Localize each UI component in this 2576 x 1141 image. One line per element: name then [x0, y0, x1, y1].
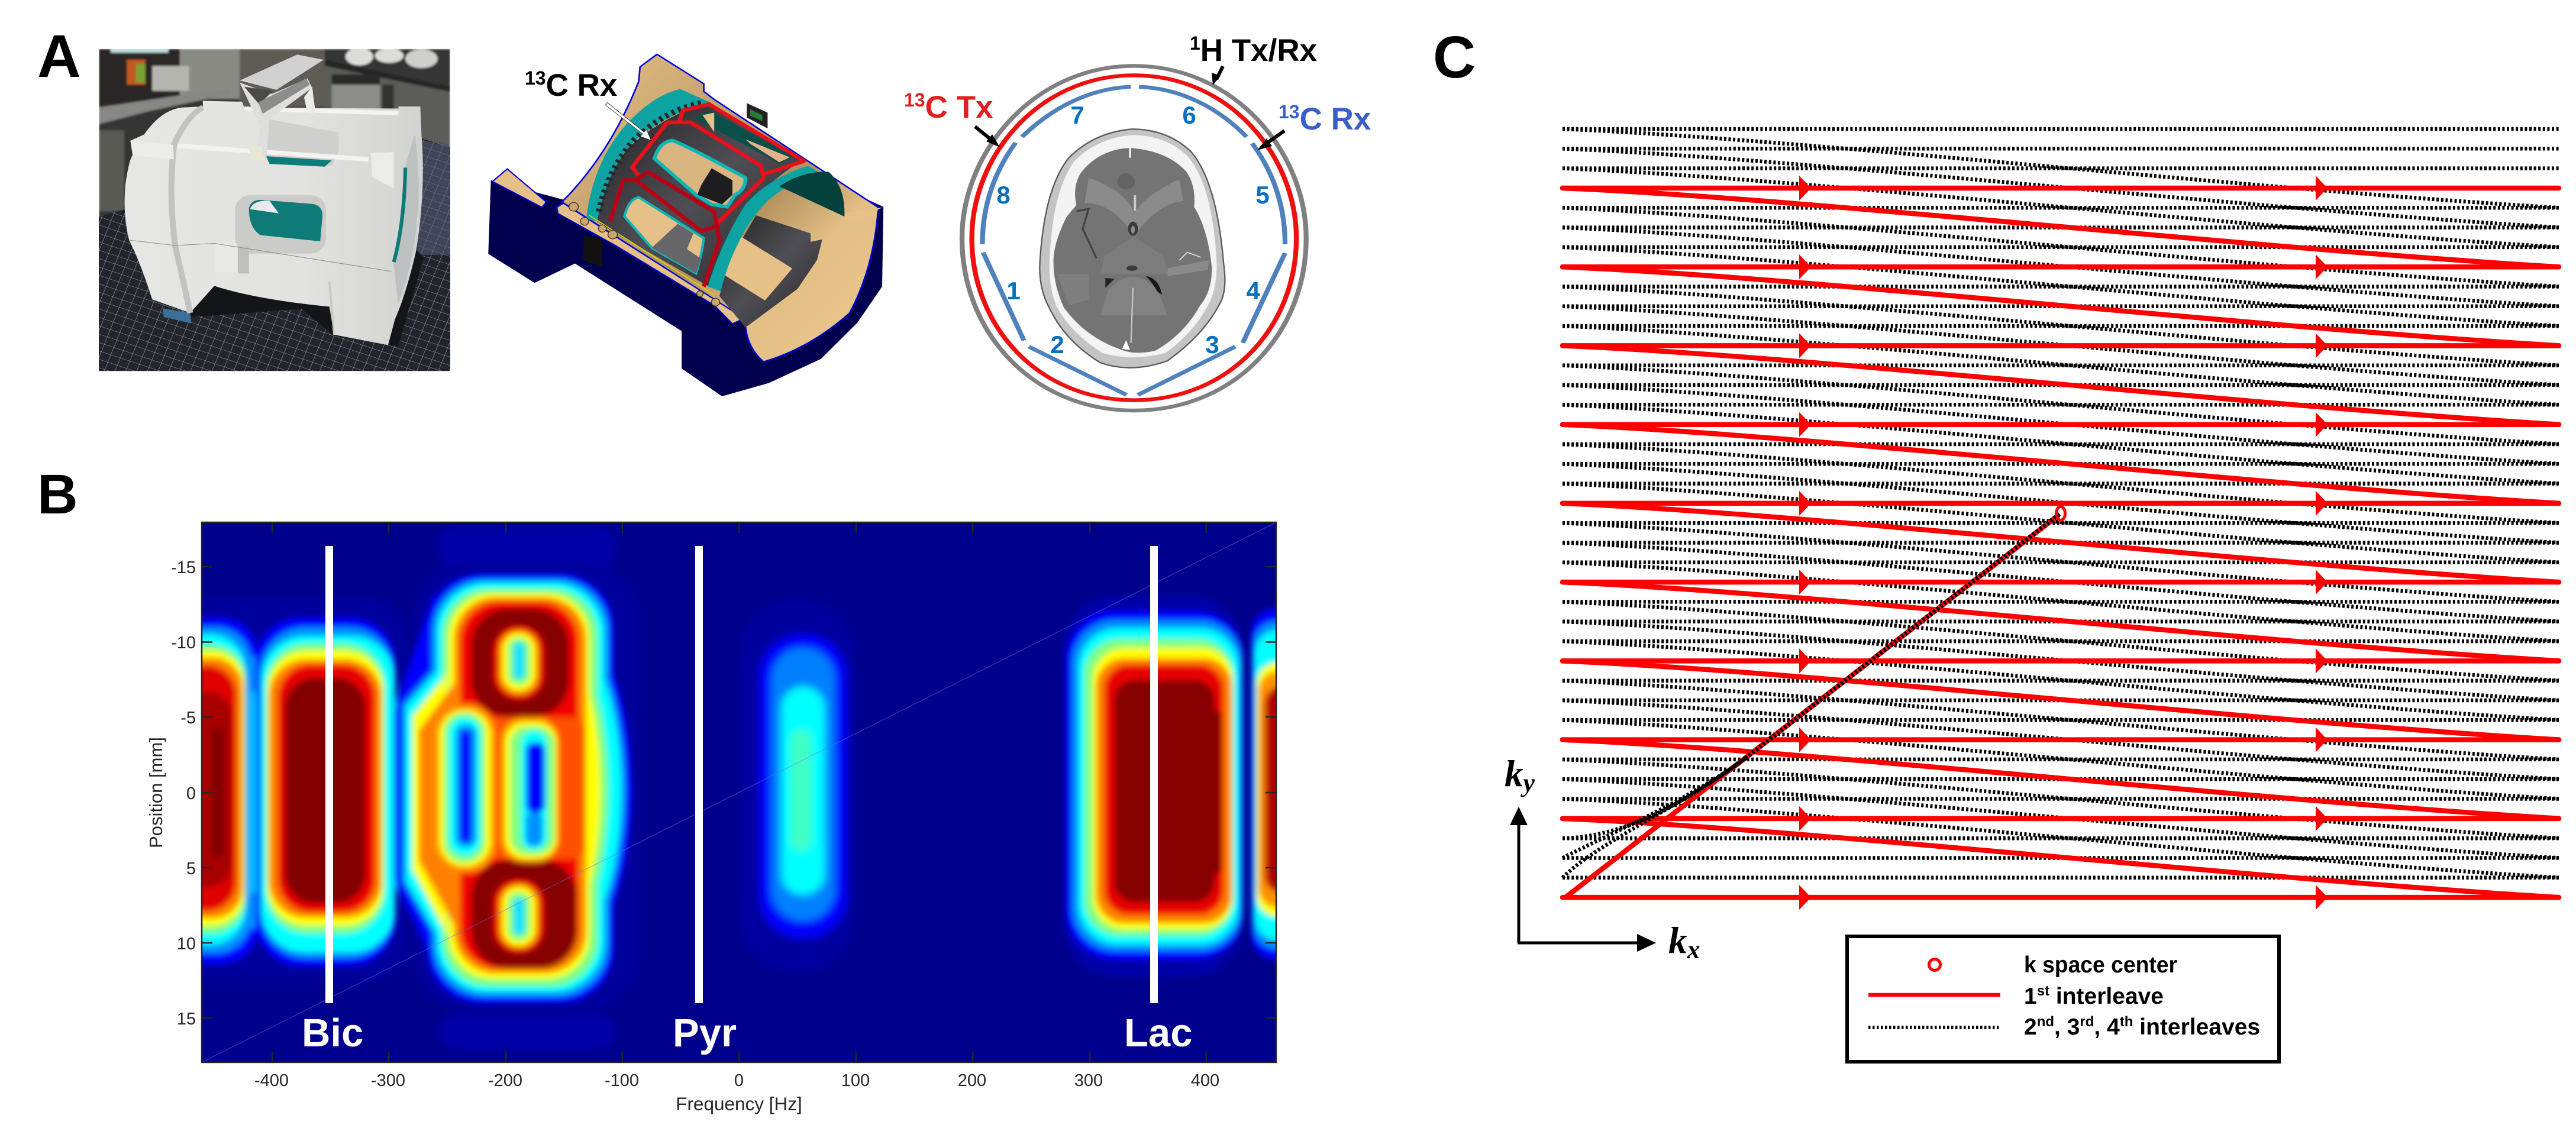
kx label: k — [1668, 920, 1687, 961]
x-axis tick labels: 0 — [734, 1071, 744, 1090]
x-axis tick labels: -200 — [488, 1071, 522, 1090]
legend text: 1st interleave: 1 — [2024, 984, 2037, 1009]
legend text: k space center: k space center — [2024, 952, 2177, 978]
x-axis title: Frequency [Hz] — [676, 1093, 802, 1114]
label: 13C Tx: 13 — [904, 89, 925, 111]
y-axis tick labels: 10 — [177, 935, 196, 953]
coil layout cross-section diagram — [904, 33, 1371, 410]
label: 13C Rx: C Rx — [1300, 102, 1371, 137]
legend text: other interleaves: , 3 — [2054, 1014, 2080, 1040]
13C Tx coil ring — [972, 75, 1296, 400]
label: 1H Tx/Rx: H Tx/Rx — [1200, 33, 1318, 68]
y-axis tick labels: 5 — [186, 859, 196, 878]
red trajectory: 1st interleave — [1563, 188, 2559, 897]
outer 1H Tx/Rx coil ring — [962, 66, 1306, 410]
kx axis arrow — [1518, 934, 1656, 952]
metabolite labels — [304, 1017, 1192, 1055]
legend — [1847, 936, 2279, 1062]
label: 13C Rx on cutaway: 13 — [525, 67, 546, 89]
legend text: 1st interleave: st — [2037, 983, 2049, 999]
panel label B: B — [37, 463, 78, 526]
element numbers: 2 — [1050, 331, 1064, 358]
label: 1H Tx/Rx: 1 — [1190, 33, 1200, 54]
axial brain MR image — [1040, 129, 1225, 368]
x-axis tick labels: 300 — [1074, 1071, 1103, 1090]
element numbers — [996, 101, 1270, 358]
x-axis tick labels — [254, 1071, 1219, 1090]
13C Rx array elements — [982, 87, 1285, 395]
label: 13C Rx on cutaway: C Rx — [546, 68, 618, 103]
x-axis tick labels: 200 — [958, 1071, 986, 1090]
y-axis tick labels: 15 — [177, 1010, 196, 1029]
legend text: 1st interleave: interleave — [2049, 984, 2164, 1009]
element numbers: 8 — [996, 181, 1011, 209]
y-axis tick labels: 0 — [186, 784, 196, 803]
legend text: other interleaves: nd — [2037, 1014, 2054, 1030]
element numbers: 1 — [1006, 277, 1021, 305]
x-axis tick labels: -400 — [254, 1071, 289, 1090]
panel B: spectral-spatial heat map — [37, 463, 1312, 1114]
x-axis tick labels: -300 — [371, 1071, 405, 1090]
element numbers: 4 — [1246, 277, 1260, 305]
legend symbol: other interleaves — [1868, 1026, 2000, 1029]
metabolite frequency markers — [325, 546, 1158, 1003]
panel C: k-space trajectory — [1433, 24, 2559, 1062]
direction arrowheads — [1799, 176, 2328, 910]
metabolite labels: Bic — [302, 1011, 363, 1055]
legend text: other interleaves: th — [2120, 1014, 2133, 1030]
x-axis tick labels: 400 — [1191, 1071, 1219, 1090]
ky axis arrow — [1510, 807, 1528, 943]
legend text: other interleaves: 2 — [2024, 1014, 2037, 1040]
panel label C: C — [1433, 24, 1476, 90]
legend symbol: k space center — [1929, 959, 1941, 970]
black dotted rows: 2nd, 3rd, 4th interleaves — [1563, 129, 2559, 878]
element numbers: 6 — [1182, 101, 1196, 129]
metabolite labels: Lac — [1124, 1011, 1192, 1055]
element numbers: 7 — [1070, 101, 1084, 129]
ky label: k — [1505, 753, 1523, 794]
panel label A: A — [37, 22, 81, 90]
legend symbol: 1st interleave — [1868, 993, 2000, 997]
heat map image — [172, 522, 1312, 1062]
kx label: x — [1686, 935, 1700, 964]
label: 13C Tx: C Tx — [925, 90, 993, 125]
photo of head coil — [99, 48, 450, 371]
black dotted prephasing paths to k-space center — [1563, 514, 2059, 878]
k-space center marker — [2057, 506, 2065, 521]
element numbers: 3 — [1205, 331, 1219, 358]
metabolite labels: Pyr — [673, 1011, 737, 1055]
y-axis tick labels: -5 — [180, 709, 196, 728]
x-axis tick labels: -100 — [605, 1071, 639, 1090]
y-axis tick labels — [171, 558, 196, 1029]
y-axis tick labels: -10 — [171, 633, 196, 652]
label: 13C Rx: 13 — [1279, 101, 1300, 122]
plot frame and ticks — [202, 522, 1276, 1062]
panel A: coil hardware — [37, 22, 1371, 410]
y-axis tick labels: -15 — [171, 558, 196, 577]
legend text: other interleaves: , 4 — [2094, 1014, 2120, 1040]
legend text: other interleaves: interleaves — [2133, 1014, 2260, 1040]
arrows to coil rings — [975, 66, 1284, 150]
legend text: other interleaves: rd — [2080, 1014, 2094, 1030]
coil cutaway CAD drawing — [488, 54, 883, 396]
ky label: y — [1521, 768, 1535, 797]
x-axis tick labels: 100 — [841, 1071, 870, 1090]
y-axis title: Position [mm] — [146, 737, 166, 848]
element numbers: 5 — [1255, 181, 1270, 209]
